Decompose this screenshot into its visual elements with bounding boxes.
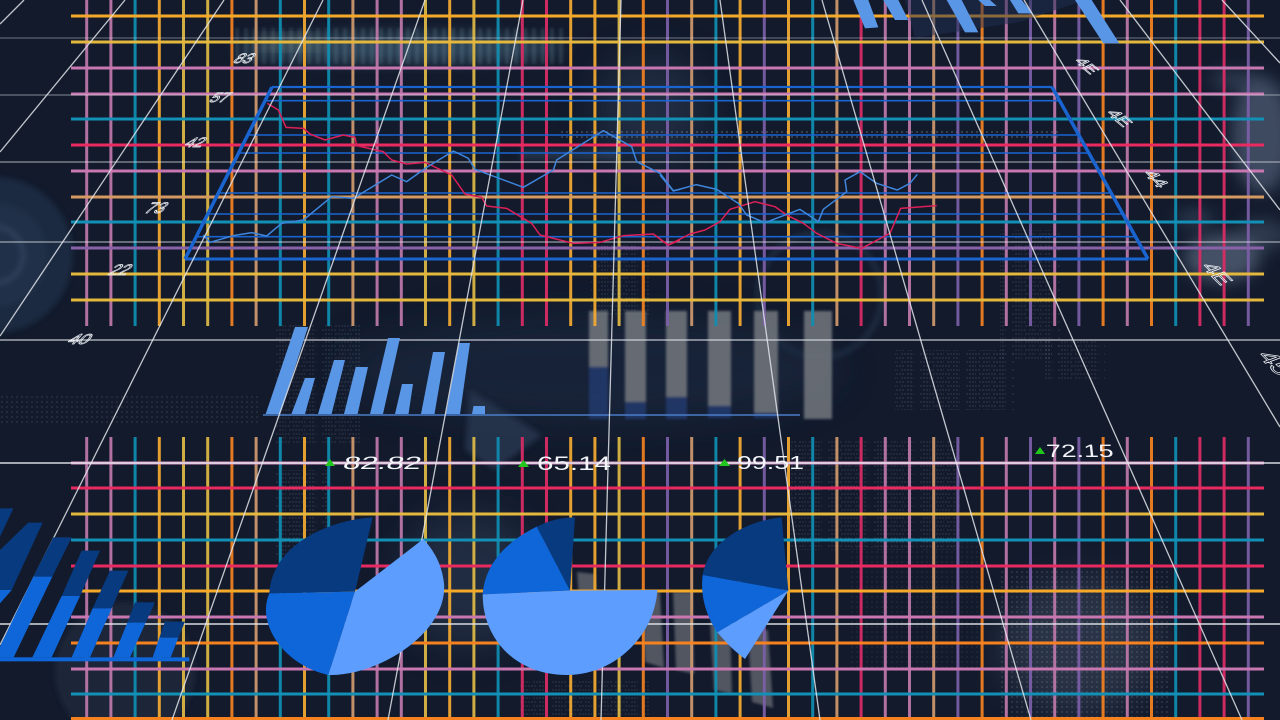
slice: medium bbox=[702, 575, 788, 632]
bar chart: lower left two-tone bars bbox=[0, 508, 189, 661]
background: top glow bbox=[235, 28, 565, 64]
background: central dial bbox=[340, 55, 882, 650]
axis tick labels: left: 83 bbox=[229, 51, 260, 66]
ghost bars: blue feet bbox=[589, 367, 778, 419]
grid: upper colored verticals bbox=[87, 0, 1248, 326]
axis tick labels: right: 44 bbox=[1140, 168, 1173, 190]
axis tick labels: left bbox=[63, 51, 260, 347]
ghost bars: grey tops bbox=[589, 311, 832, 419]
slice: dark bbox=[269, 517, 373, 593]
readout 99.51: 99.51 bbox=[737, 453, 804, 473]
axis tick labels: right: 4E bbox=[1197, 260, 1237, 288]
readout 82.82: 82.82 bbox=[341, 452, 424, 473]
top right slanted bars bbox=[853, 0, 1119, 43]
axis tick labels: right bbox=[1071, 56, 1280, 379]
bar chart baseline bbox=[263, 414, 800, 416]
axis tick labels: left: 42 bbox=[180, 135, 211, 150]
bars bbox=[266, 327, 485, 414]
axis tick labels: left: 40 bbox=[63, 331, 97, 347]
slice: medium bbox=[266, 592, 355, 675]
background: dotted data band bbox=[0, 131, 1060, 425]
line chart: red series bbox=[267, 103, 937, 248]
slice: dark bbox=[537, 517, 575, 591]
pie chart 3 bbox=[702, 517, 788, 659]
ghost bar chart: lower centre bbox=[577, 572, 773, 708]
background: code text blocks bbox=[270, 230, 1105, 720]
readout 72.15: 72.15 bbox=[1045, 441, 1114, 461]
value readouts bbox=[325, 441, 1114, 475]
axis tick labels: left: 22 bbox=[104, 261, 137, 278]
axis tick labels: left: 73 bbox=[140, 199, 173, 216]
ghost bar chart: centre bbox=[589, 311, 832, 419]
medium lower segments bbox=[0, 577, 178, 657]
background: earth globe bbox=[1175, 70, 1280, 282]
grid: lower colored horizontals bbox=[71, 463, 1264, 718]
grid: upper colored horizontals bbox=[71, 16, 1264, 300]
faint panel behind bars bbox=[905, 0, 1085, 38]
line chart: blue series bbox=[203, 131, 917, 242]
slice: light bbox=[717, 591, 788, 659]
background: ghost triangle bbox=[465, 390, 542, 470]
background: left dial bbox=[0, 177, 73, 333]
slice: medium bbox=[483, 527, 570, 594]
readout 82.82 bbox=[325, 452, 424, 473]
axis tick labels: right: 4E bbox=[1071, 56, 1102, 76]
grid: lower colored verticals bbox=[87, 437, 1248, 720]
bars bbox=[853, 0, 1119, 43]
readout 99.51 bbox=[719, 453, 804, 473]
pie chart 1 bbox=[266, 517, 444, 675]
background: lower left dial bbox=[55, 602, 195, 720]
dark upper segments bbox=[0, 508, 185, 638]
pie chart 2 bbox=[483, 517, 657, 675]
axis tick labels: right: 4E bbox=[1103, 107, 1137, 129]
line chart frame: blue trapezoid bbox=[185, 87, 1148, 259]
slice: light bbox=[483, 590, 657, 675]
axis tick labels: left: 57 bbox=[205, 90, 236, 105]
readout 65.14: 65.14 bbox=[537, 454, 612, 475]
bar chart: light blue slanted bars bbox=[263, 327, 800, 415]
baseline bbox=[0, 657, 189, 661]
slice: light bbox=[328, 539, 444, 675]
background: dotted cloud lower right bbox=[850, 540, 1170, 720]
readout 65.14 bbox=[518, 454, 612, 475]
readout 72.15 bbox=[1035, 441, 1114, 461]
slice: dark bbox=[703, 517, 788, 591]
